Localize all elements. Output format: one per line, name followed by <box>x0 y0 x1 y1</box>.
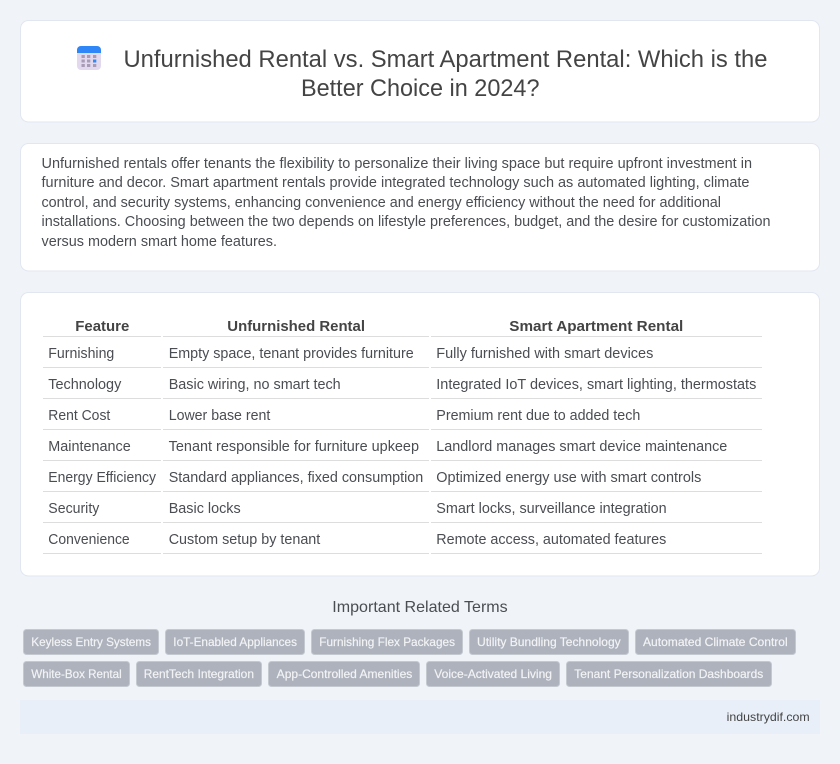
table row: rent cost <box>48 408 640 424</box>
tag: renttech integration: RentTech Integration <box>144 667 254 681</box>
table row: energy efficiency <box>48 470 701 486</box>
table row: furnishing <box>48 346 653 362</box>
heading: Better Choice in 2024? <box>301 75 540 102</box>
table row: rent cost: Premium rent due to added tech <box>436 408 640 424</box>
table row: energy efficiency: Standard appliances, fixed consumption <box>169 470 423 486</box>
footer bar <box>20 700 820 734</box>
table row: rent cost: Rent Cost <box>48 408 110 424</box>
heading: Unfurnished Rental vs. Smart Apartment Rental: Which is the <box>124 46 768 73</box>
heading <box>124 46 768 102</box>
table row: maintenance <box>48 439 727 455</box>
tag: furnishing flex packages <box>312 630 462 654</box>
table header row: Unfurnished Rental <box>227 319 365 335</box>
tag: voice-activated living <box>426 662 560 686</box>
table row: technology: Basic wiring, no smart tech <box>169 377 341 393</box>
table row: technology <box>48 377 756 393</box>
table row: convenience: Custom setup by tenant <box>169 532 320 548</box>
tag: white-box rental: White-Box Rental <box>31 667 122 681</box>
table header row: Feature <box>75 319 129 335</box>
table row: energy efficiency: Energy Efficiency <box>48 470 157 486</box>
table row: convenience <box>48 532 666 548</box>
table row: security: Security <box>48 501 100 517</box>
tag: iot-enabled appliances <box>166 630 304 654</box>
tag: keyless entry systems <box>24 630 158 654</box>
table row: technology: Integrated IoT devices, smart lighting, thermostats <box>436 377 756 393</box>
tag: keyless entry systems: Keyless Entry Systems <box>31 635 151 649</box>
tag: iot-enabled appliances: IoT-Enabled Appliances <box>173 635 297 649</box>
text block: description: control, and security systems, enhancing convenience and energy efficiency without the need for additional <box>42 195 721 211</box>
tag: furnishing flex packages: Furnishing Flex Packages <box>319 635 455 649</box>
tag: utility bundling technology: Utility Bundling Technology <box>477 635 621 649</box>
table row: technology: Technology <box>48 377 122 393</box>
tag: automated climate control: Automated Climate Control <box>643 635 788 649</box>
table row: security <box>48 501 667 517</box>
tag: renttech integration <box>136 662 262 686</box>
table row: convenience: Remote access, automated features <box>436 532 666 548</box>
text block: description <box>42 156 770 250</box>
footer bar: industrydif.com <box>727 710 810 724</box>
icon: calendar <box>77 46 101 70</box>
panel: intro text <box>20 144 820 271</box>
table row: furnishing: Furnishing <box>48 346 114 362</box>
tag: voice-activated living: Voice-Activated Living <box>434 667 552 681</box>
table row: furnishing: Empty space, tenant provides furniture <box>169 346 414 362</box>
table row: convenience: Convenience <box>48 532 130 548</box>
table row: rent cost: Lower base rent <box>169 408 270 424</box>
table row: maintenance: Tenant responsible for furniture upkeep <box>169 439 419 455</box>
panel: title header <box>20 20 820 122</box>
heading: important related terms: Important Related Terms <box>332 599 508 616</box>
tag: utility bundling technology <box>470 630 628 654</box>
table row: furnishing: Fully furnished with smart devices <box>436 346 653 362</box>
table row: energy efficiency: Optimized energy use with smart controls <box>436 470 701 486</box>
panel: comparison table <box>20 292 820 576</box>
tag: automated climate control <box>636 630 796 654</box>
table row: security: Basic locks <box>169 501 241 517</box>
tag: app-controlled amenities <box>268 662 420 686</box>
table header row <box>75 319 683 335</box>
text block: description: furniture and decor. Smart apartment rentals provide integrated technology such as automated lighting, climate <box>42 175 750 191</box>
tag: tenant personalization dashboards <box>566 662 772 686</box>
text block: description: Unfurnished rentals offer tenants the flexibility to personalize their living space but require upfront investment in <box>42 156 752 172</box>
tag: white-box rental <box>24 662 130 686</box>
table row: security: Smart locks, surveillance integration <box>436 501 667 517</box>
table header row: Smart Apartment Rental <box>509 319 683 335</box>
text block: description: installations. Choosing between the two depends on lifestyle preferences, budget, and the desire for customization <box>42 214 770 230</box>
tag: app-controlled amenities: App-Controlled Amenities <box>277 667 412 681</box>
table row: maintenance: Landlord manages smart device maintenance <box>436 439 727 455</box>
text block: description: versus modern smart home features. <box>42 234 277 250</box>
table row: maintenance: Maintenance <box>48 439 131 455</box>
tag group: related terms <box>24 630 796 686</box>
tag: tenant personalization dashboards: Tenant Personalization Dashboards <box>574 667 763 681</box>
